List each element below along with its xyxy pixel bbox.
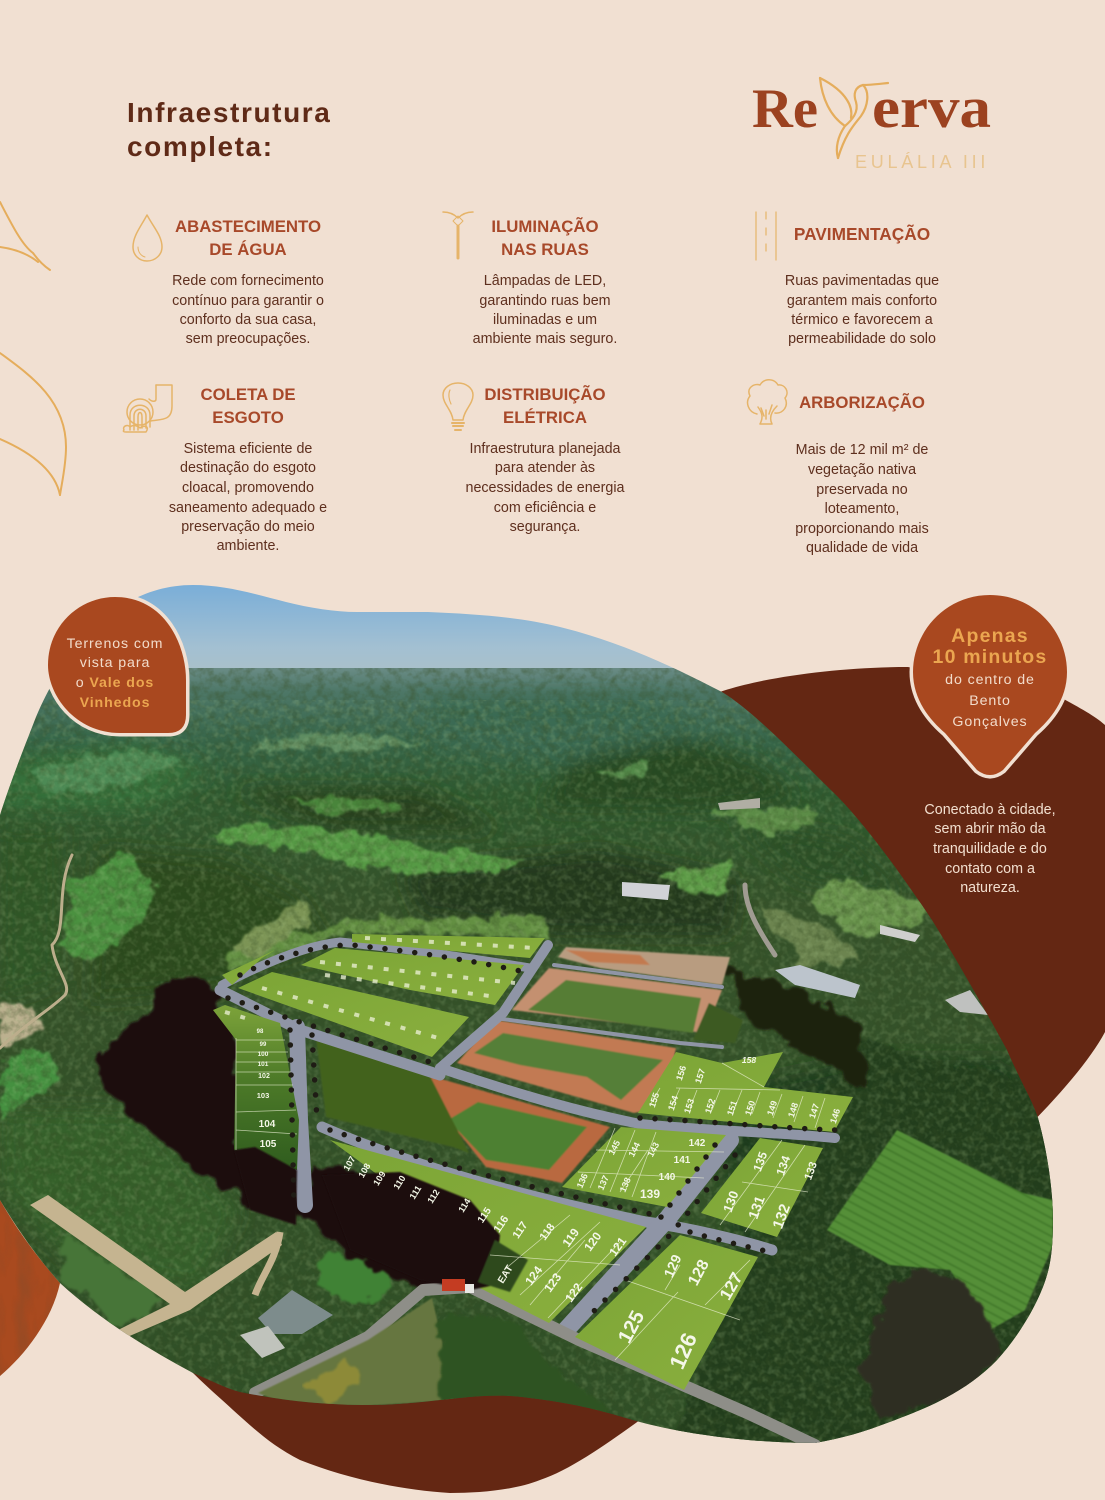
icon: hummingbird	[820, 78, 888, 158]
dark brown background blob	[193, 667, 1105, 1493]
lot numbers: 115	[476, 1205, 494, 1225]
title: Infraestrutura	[127, 97, 331, 128]
feature: pavimentação	[756, 212, 939, 347]
lot numbers: 144	[626, 1141, 642, 1159]
heading: PAVIMENTAÇÃO	[794, 224, 930, 244]
lot numbers: 130	[720, 1189, 742, 1214]
description: sem preocupações.	[186, 331, 310, 347]
lot numbers: 99	[260, 1042, 267, 1048]
description: loteamento,	[825, 501, 899, 517]
feature: iluminação nas ruas	[443, 212, 617, 347]
lot numbers: 100	[258, 1051, 269, 1058]
lot numbers: EAT	[496, 1264, 516, 1286]
callout text: Vinhedos	[80, 695, 150, 711]
lot numbers: 150	[743, 1099, 757, 1117]
lot numbers: 110	[391, 1174, 408, 1191]
lot numbers: 114	[456, 1197, 473, 1214]
description: Infraestrutura planejada	[469, 441, 621, 457]
heading	[484, 384, 606, 427]
text on dark panel: natureza.	[960, 880, 1020, 896]
description: garantem mais conforto	[787, 293, 937, 309]
pin headline	[933, 625, 1047, 668]
pin headline: Apenas	[951, 625, 1029, 647]
lot numbers: 133	[802, 1160, 820, 1182]
roadside trees	[228, 945, 835, 1315]
description: destinação do esgoto	[180, 460, 316, 476]
lot numbers: 158	[742, 1055, 756, 1065]
icon: street lamp	[443, 212, 473, 258]
description: para atender às	[495, 460, 595, 476]
text on dark panel: Conectado à cidade,	[924, 802, 1056, 818]
lot numbers: 147	[807, 1102, 821, 1120]
buildings	[622, 798, 988, 1015]
lot numbers: 149	[765, 1099, 779, 1117]
heading: COLETA DE	[200, 385, 296, 404]
roads	[0, 855, 835, 1445]
lot numbers: 116	[492, 1214, 511, 1235]
description: contínuo para garantir o	[172, 293, 324, 309]
shadow on lots	[234, 1147, 528, 1292]
callout text: o Vale dos	[76, 675, 154, 691]
lot numbers: 109	[371, 1169, 388, 1187]
heading: ARBORIZAÇÃO	[799, 392, 925, 412]
description: Sistema eficiente de	[184, 441, 312, 457]
pin text: do centro de	[945, 672, 1035, 688]
small lot number marks	[225, 938, 535, 1040]
feature: distribuição elétrica	[443, 383, 625, 535]
heading: ELÉTRICA	[503, 408, 587, 427]
description: conforto da sua casa,	[180, 312, 316, 328]
description	[169, 441, 327, 554]
heading	[491, 216, 599, 259]
lot numbers: 152	[703, 1097, 717, 1115]
lot numbers: 98	[257, 1029, 264, 1035]
lot numbers: 120	[581, 1229, 605, 1254]
description: permeabilidade do solo	[788, 331, 936, 347]
description: preservada no	[816, 482, 908, 498]
lot numbers: 138	[618, 1176, 633, 1194]
description	[785, 273, 939, 347]
description: vegetação nativa	[808, 462, 916, 478]
callout text: Terrenos com	[67, 636, 163, 652]
description: com eficiência e	[494, 500, 596, 516]
callout text	[67, 636, 163, 711]
icon: light bulb	[443, 383, 473, 430]
large-scale light and shadow of the hills	[0, 700, 1040, 1300]
heading	[175, 217, 321, 259]
lot numbers: 154	[666, 1094, 680, 1112]
logo subtitle: EULÁLIA III	[855, 152, 989, 172]
description: necessidades de energia	[466, 480, 625, 496]
lot numbers: 141	[674, 1155, 691, 1166]
description: cloacal, promovendo	[182, 480, 314, 496]
logo wordmark: Re	[752, 78, 818, 140]
dark treetops beside the vineyard	[860, 1271, 1000, 1420]
icon: road	[756, 212, 776, 260]
lot numbers	[257, 1029, 842, 1373]
description	[795, 442, 929, 556]
lot numbers: 139	[640, 1187, 660, 1201]
lot numbers: 136	[575, 1172, 590, 1190]
lot numbers: 146	[828, 1107, 842, 1125]
lower-right forest	[674, 1038, 1053, 1443]
icon: tree	[748, 380, 787, 424]
lot numbers: 102	[258, 1073, 270, 1080]
description: ambiente mais seguro.	[473, 331, 617, 347]
lot numbers: 155	[647, 1091, 661, 1109]
heading: DE ÁGUA	[209, 240, 287, 259]
lot numbers: 140	[659, 1172, 676, 1183]
description: térmico e favorecem a	[791, 312, 933, 328]
lot numbers: 137	[596, 1174, 611, 1192]
lot numbers: 112	[425, 1188, 442, 1205]
heading: ABASTECIMENTO	[175, 217, 321, 236]
text on dark panel: contato com a	[945, 861, 1035, 877]
lot numbers: 101	[258, 1061, 269, 1068]
description	[466, 441, 625, 535]
lot numbers: 148	[786, 1101, 800, 1119]
heading: ILUMINAÇÃO	[491, 216, 599, 236]
description: saneamento adequado e	[169, 500, 327, 516]
description: preservação do meio	[181, 519, 315, 535]
lot numbers: 129	[660, 1252, 685, 1280]
lot numbers: 145	[606, 1139, 622, 1157]
lot numbers: 118	[538, 1222, 558, 1243]
title	[127, 97, 331, 162]
aerial photograph of the lots	[0, 585, 1053, 1443]
textured orange blob	[0, 1200, 60, 1376]
lot numbers: 107	[341, 1154, 357, 1173]
text on dark panel: sem abrir mão da	[934, 821, 1046, 837]
description: qualidade de vida	[806, 540, 918, 556]
callout: 10 minutes pin	[913, 595, 1067, 775]
text on dark panel	[924, 802, 1056, 896]
lot numbers: 128	[685, 1257, 713, 1289]
heading	[200, 385, 296, 427]
logo wordmark	[752, 75, 991, 140]
description: ambiente.	[217, 538, 279, 554]
lot numbers: 125	[614, 1307, 649, 1347]
pin shape	[913, 595, 1067, 775]
sky	[138, 585, 688, 675]
lot numbers: 142	[689, 1138, 706, 1149]
description	[172, 273, 324, 347]
feature: abastecimento de água	[133, 215, 324, 347]
description: garantindo ruas bem	[479, 293, 611, 309]
lot numbers: 105	[260, 1139, 277, 1150]
lot numbers: 124	[522, 1263, 546, 1288]
lot numbers: 143	[645, 1141, 661, 1159]
description: Rede com fornecimento	[172, 273, 324, 289]
lot numbers: 156	[674, 1064, 688, 1082]
lot numbers: 157	[693, 1067, 707, 1085]
forest highlights	[0, 700, 1105, 1470]
lot numbers: 103	[257, 1091, 269, 1100]
lot numbers: 108	[356, 1161, 372, 1180]
description: segurança.	[510, 519, 580, 535]
feature: coleta de esgoto	[123, 385, 327, 554]
right vineyard	[827, 1130, 1053, 1330]
decorative leaf outlines	[0, 202, 66, 495]
icon: sewer pipe	[123, 385, 172, 432]
pin headline: 10 minutos	[933, 646, 1047, 668]
fields	[0, 730, 932, 1120]
deep shadow forests	[95, 970, 868, 1290]
forest canopy texture	[0, 668, 1105, 1468]
lower-left dirt roads and green	[30, 1195, 620, 1420]
description: Lâmpadas de LED,	[484, 273, 606, 289]
lot numbers: 151	[725, 1099, 739, 1117]
description: Mais de 12 mil m² de	[796, 442, 928, 458]
heading: NAS RUAS	[501, 240, 589, 259]
icon: water drop	[133, 215, 162, 261]
lot numbers: 153	[682, 1097, 696, 1115]
lot numbers: 121	[606, 1234, 630, 1259]
lot numbers: 123	[541, 1270, 565, 1295]
logo wordmark: erva	[872, 75, 991, 140]
landscape base	[0, 668, 1105, 1468]
pin text: Gonçalves	[952, 714, 1028, 730]
lot numbers: 131	[745, 1193, 768, 1221]
heading: DISTRIBUIÇÃO	[484, 384, 606, 404]
lot numbers: 119	[559, 1225, 582, 1250]
description	[473, 273, 617, 347]
lot numbers: 135	[750, 1150, 770, 1173]
callout text: vista para	[80, 655, 150, 671]
pin text	[945, 672, 1035, 730]
callout shape	[48, 597, 186, 733]
lot numbers: 126	[664, 1329, 702, 1373]
description: iluminadas e um	[493, 312, 597, 328]
lot numbers: 132	[770, 1202, 794, 1231]
lot numbers: 127	[716, 1269, 747, 1303]
lot numbers: 122	[562, 1280, 586, 1305]
lot numbers: 134	[773, 1154, 793, 1177]
feature: arborização	[748, 380, 929, 556]
title: completa:	[127, 131, 274, 162]
logo: Reserva Eulália III	[752, 75, 991, 172]
lot boundary lines	[236, 1038, 825, 1360]
roadside house	[258, 1290, 333, 1334]
callout: Vale dos Vinhedos	[48, 597, 186, 733]
pin text: Bento	[969, 693, 1011, 709]
lot numbers: 104	[259, 1119, 276, 1130]
lot numbers: 117	[511, 1220, 530, 1241]
lot numbers: 111	[407, 1184, 423, 1201]
heading: ESGOTO	[212, 408, 284, 427]
bare earth plots	[316, 947, 743, 1183]
green lot blocks	[213, 934, 853, 1390]
description: proporcionando mais	[795, 521, 929, 537]
text on dark panel: tranquilidade e do	[933, 841, 1047, 857]
description: Ruas pavimentadas que	[785, 273, 939, 289]
